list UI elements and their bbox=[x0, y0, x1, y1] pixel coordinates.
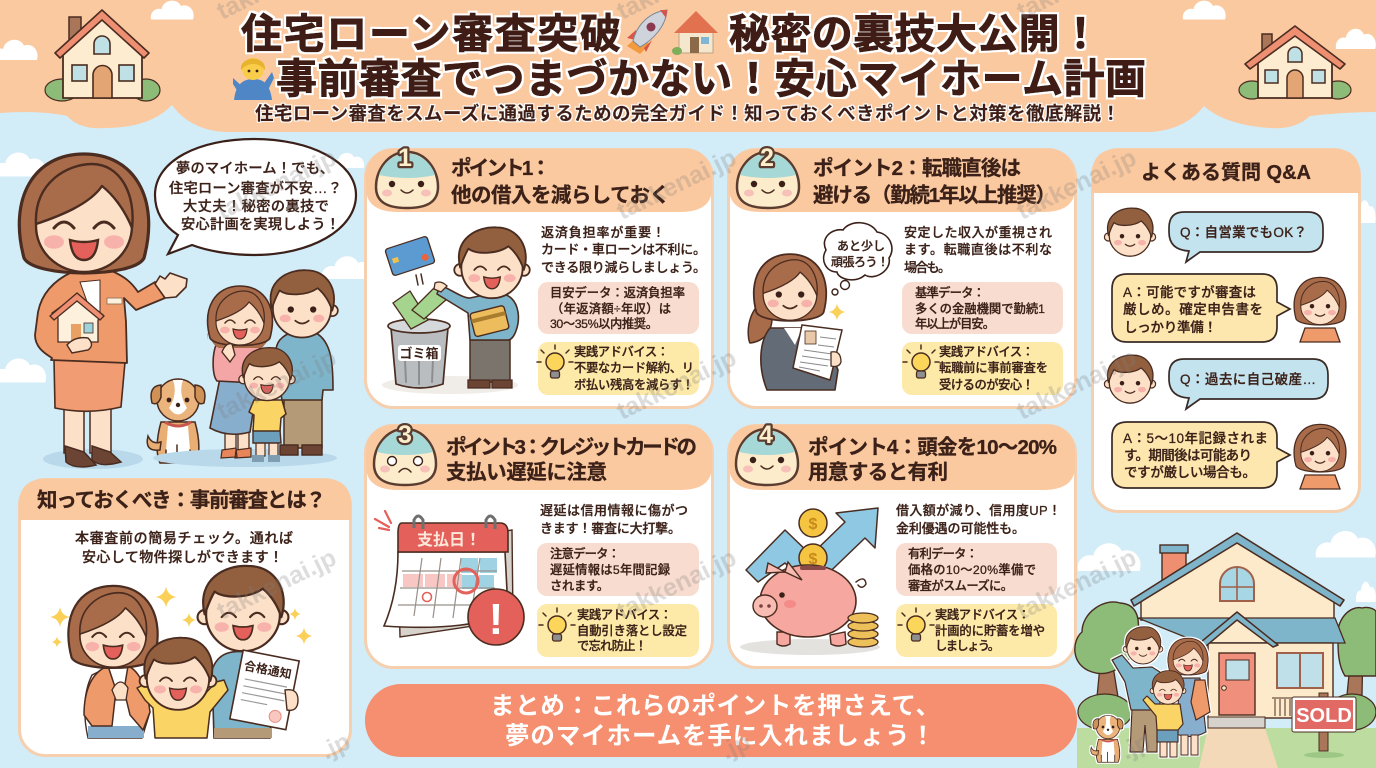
data callout: 基準データ： bbox=[915, 285, 985, 300]
summary banner bbox=[365, 684, 1077, 757]
illustration: overdue calendar bbox=[375, 511, 524, 645]
answer 1 bbox=[1112, 274, 1346, 342]
body text: 返済負担率が重要！ bbox=[541, 225, 665, 240]
explanation text: 本審査前の簡易チェック。通れば bbox=[75, 530, 293, 546]
panel heading: ポイント3：クレジットカードの bbox=[446, 436, 697, 459]
icon: right house bbox=[1239, 26, 1351, 99]
question 1 bbox=[1104, 208, 1323, 262]
panel heading bbox=[729, 149, 1075, 212]
mascot: 4 bbox=[759, 421, 773, 449]
header banner bbox=[0, 0, 1376, 132]
advice callout: 自動引き落とし設定 bbox=[577, 623, 687, 638]
advice callout: 計画的に貯蓄を増や bbox=[935, 623, 1045, 638]
data callout: 有利データ： bbox=[908, 546, 978, 561]
thought bubble: 頑張ろう！ bbox=[831, 255, 889, 269]
icon: person tipping hand emoji bbox=[233, 58, 274, 100]
data callout bbox=[896, 543, 1057, 596]
speech bubble bbox=[155, 139, 356, 255]
speech bubble: 夢のマイホーム！でも、 bbox=[176, 161, 334, 177]
mascot bbox=[376, 144, 438, 208]
body text: 場合も。 bbox=[904, 260, 951, 275]
answer 1: しっかり準備！ bbox=[1124, 320, 1217, 335]
summary banner: まとめ：これらのポイントを押さえて、 bbox=[490, 692, 940, 720]
body text: 遅延は信用情報に傷がつ bbox=[540, 503, 688, 518]
advisor woman bbox=[19, 154, 187, 469]
panel heading: ポイント4：頭金を10〜20% bbox=[808, 436, 1057, 459]
hero illustration: advisor and family bbox=[19, 139, 356, 469]
panel: point 1 bbox=[366, 144, 712, 408]
watermarks: takkenai.jp bbox=[1012, 544, 1141, 625]
advice callout: 実践アドバイス： bbox=[935, 607, 1030, 622]
illustration: overdue calendar: ! bbox=[489, 595, 503, 644]
title line 1: 住宅ローン審査突破 bbox=[241, 11, 621, 57]
panel heading bbox=[729, 425, 1075, 490]
data callout: されます。 bbox=[550, 579, 609, 593]
panel heading bbox=[366, 425, 712, 490]
watermarks: .jp bbox=[716, 727, 755, 765]
watermarks: takkenai.jp bbox=[212, 144, 341, 225]
data callout: 審査がスムーズに。 bbox=[908, 578, 1013, 593]
advice callout bbox=[537, 342, 699, 395]
icon: rocket emoji bbox=[627, 10, 667, 54]
data callout: 注意データ： bbox=[550, 546, 620, 561]
panel: point 2 bbox=[728, 144, 1076, 408]
mascot bbox=[374, 421, 436, 485]
body text: ます。転職直後は不利な bbox=[904, 242, 1052, 257]
dog bbox=[147, 379, 205, 463]
advice callout bbox=[896, 604, 1057, 657]
mascot bbox=[736, 421, 798, 485]
advice callout: 受けるのが安心！ bbox=[939, 377, 1034, 392]
data callout: 遅延情報は5年間記録 bbox=[550, 562, 671, 577]
mascot: 3 bbox=[398, 421, 412, 449]
panel heading: よくある質問 Q&A bbox=[1141, 161, 1311, 184]
mascot: 1 bbox=[398, 144, 412, 172]
sold sign bbox=[1292, 693, 1356, 758]
question 1: Q：自営業でもOK？ bbox=[1180, 225, 1307, 240]
summary banner: 夢のマイホームを手に入れましょう！ bbox=[505, 722, 935, 750]
body text bbox=[540, 503, 688, 536]
answer 2 bbox=[1112, 422, 1346, 489]
panel heading bbox=[366, 149, 712, 212]
boy bbox=[1157, 729, 1178, 742]
answer 1: 厳しめ。確定申告書を bbox=[1123, 301, 1263, 317]
watermarks: takkenai.jp bbox=[212, 344, 341, 425]
man bbox=[1130, 708, 1158, 752]
panel heading: ポイント2：転職直後は bbox=[813, 157, 1021, 180]
watermarks: takkenai.jp bbox=[612, 544, 741, 625]
panel heading: 支払い遅延に注意 bbox=[446, 461, 607, 484]
question 2 bbox=[1104, 355, 1328, 409]
watermarks: .jp bbox=[1116, 727, 1155, 765]
question 2: Q：過去に自己破産… bbox=[1180, 371, 1316, 387]
data callout: 年以上が目安。 bbox=[915, 316, 995, 331]
title line 2: 事前審査でつまづかない！安心マイホーム計画 bbox=[276, 56, 1146, 102]
house bbox=[1131, 533, 1345, 728]
mascot bbox=[737, 144, 799, 208]
data callout bbox=[902, 282, 1063, 334]
body text bbox=[904, 225, 1052, 275]
speech bubble: 大丈夫！秘密の裏技で bbox=[183, 198, 329, 215]
data callout: 価格の10〜20%準備で bbox=[908, 562, 1036, 577]
watermarks: takkenai.jp bbox=[612, 144, 741, 225]
trash bin: ゴミ箱 bbox=[399, 346, 439, 361]
advice callout: ボ払い残高を減らす！ bbox=[574, 377, 694, 392]
data callout: （年返済額÷年収）は bbox=[551, 301, 671, 316]
advice callout: 不要なカード解約、リ bbox=[574, 360, 694, 375]
illustration: piggy bank and rising arrow: $ bbox=[809, 551, 818, 568]
panel heading bbox=[1092, 149, 1360, 193]
illustration: sold house and family bbox=[1075, 533, 1376, 768]
watermarks bbox=[212, 0, 1155, 765]
icon: house emoji bbox=[672, 11, 718, 55]
data callout bbox=[537, 543, 699, 596]
panel: pre-screening explanation bbox=[19, 479, 351, 756]
mascot: 2 bbox=[760, 144, 774, 172]
panel: Q&A bbox=[1092, 149, 1360, 512]
trash bin bbox=[388, 319, 450, 388]
illustration: overdue calendar: 支払日！ bbox=[417, 530, 481, 549]
advice callout bbox=[537, 604, 699, 657]
body text bbox=[896, 503, 1061, 536]
sold sign: SOLD bbox=[1296, 705, 1352, 727]
approval letter: 合格通知 bbox=[243, 658, 293, 682]
panel heading: 知っておくべき：事前審査とは？ bbox=[37, 489, 326, 512]
illustration: woman with resume bbox=[748, 223, 892, 390]
title line 1 bbox=[241, 11, 1101, 57]
credit card bbox=[385, 236, 435, 276]
watermarks: takkenai.jp bbox=[1012, 344, 1141, 425]
family bbox=[153, 270, 338, 467]
mother bbox=[1176, 678, 1206, 737]
explanation text bbox=[75, 530, 293, 565]
answer 2: す。期間後は可能あり bbox=[1124, 448, 1252, 463]
watermarks: takkenai.jp bbox=[212, 544, 341, 625]
subtitle: 住宅ローン審査をスムーズに通過するための完全ガイド！知っておくべきポイントと対策を徹底解説！ bbox=[255, 103, 1120, 124]
boy bbox=[434, 227, 530, 388]
body text: きます！審査に大打撃。 bbox=[540, 521, 681, 536]
advice callout: 実践アドバイス： bbox=[574, 344, 669, 359]
advice callout: 実践アドバイス： bbox=[939, 344, 1034, 359]
icon: left house bbox=[45, 10, 160, 101]
speech bubble: 安心計画を実現しよう！ bbox=[181, 217, 340, 233]
watermarks: takkenai.jp bbox=[612, 344, 741, 425]
advice callout bbox=[902, 342, 1063, 395]
body text: 安定した収入が重視され bbox=[904, 225, 1052, 240]
advice callout: 実践アドバイス： bbox=[577, 607, 672, 622]
watermarks: takkenai.jp bbox=[1012, 144, 1141, 225]
body text: できる限り減らしましょう。 bbox=[541, 260, 706, 275]
bills bbox=[393, 291, 428, 329]
illustration: boy throwing money and card in bin bbox=[382, 227, 530, 394]
panel heading: 用意すると有利 bbox=[808, 461, 948, 484]
illustration: happy family with approval letter bbox=[50, 566, 312, 738]
data callout bbox=[538, 282, 699, 334]
thought bubble bbox=[824, 223, 892, 295]
panel heading: ポイント1： bbox=[451, 157, 551, 180]
advice callout: 転職前に事前審査を bbox=[939, 360, 1048, 375]
panel: point 3 bbox=[366, 421, 712, 668]
advice callout: で忘れ防止！ bbox=[577, 638, 647, 653]
answer 2: ですが厳しい場合も。 bbox=[1124, 464, 1256, 480]
answer 2: A：5〜10年記録されま bbox=[1123, 430, 1268, 446]
panel heading bbox=[19, 479, 351, 520]
family with white outline bbox=[1091, 627, 1210, 762]
body text bbox=[541, 225, 706, 275]
watermarks: .jp bbox=[316, 727, 355, 765]
panel: point 4 bbox=[728, 421, 1076, 668]
title line 1: 秘密の裏技大公開！ bbox=[729, 11, 1101, 57]
body text: 借入額が減り、信用度UP！ bbox=[896, 503, 1061, 518]
answer 1: A：可能ですが審査は bbox=[1123, 284, 1256, 300]
resume bbox=[793, 325, 842, 380]
panel heading: 避ける（勤続1年以上推奨） bbox=[813, 184, 1056, 207]
data callout: 多くの金融機関で勤続1 bbox=[915, 301, 1045, 316]
body text: カード・車ローンは不利に。 bbox=[541, 242, 706, 257]
speech bubble: 住宅ローン審査が不安…？ bbox=[169, 180, 342, 197]
advice callout: しましょう。 bbox=[935, 639, 1000, 653]
dog bbox=[1091, 715, 1123, 762]
data callout: 目安データ：返済負担率 bbox=[550, 285, 685, 300]
data callout: 30〜35%以内推奨。 bbox=[550, 316, 658, 331]
trees bbox=[1075, 602, 1376, 730]
body text: 金利優遇の可能性も。 bbox=[896, 521, 1025, 536]
panel heading: 他の借入を減らしておく bbox=[451, 183, 670, 207]
illustration: piggy bank and rising arrow: $ bbox=[809, 516, 818, 533]
thought bubble: あと少し bbox=[837, 238, 885, 253]
illustration: piggy bank and rising arrow bbox=[740, 508, 880, 655]
approval letter bbox=[230, 650, 299, 730]
explanation text: 安心して物件探しができます！ bbox=[82, 549, 283, 565]
